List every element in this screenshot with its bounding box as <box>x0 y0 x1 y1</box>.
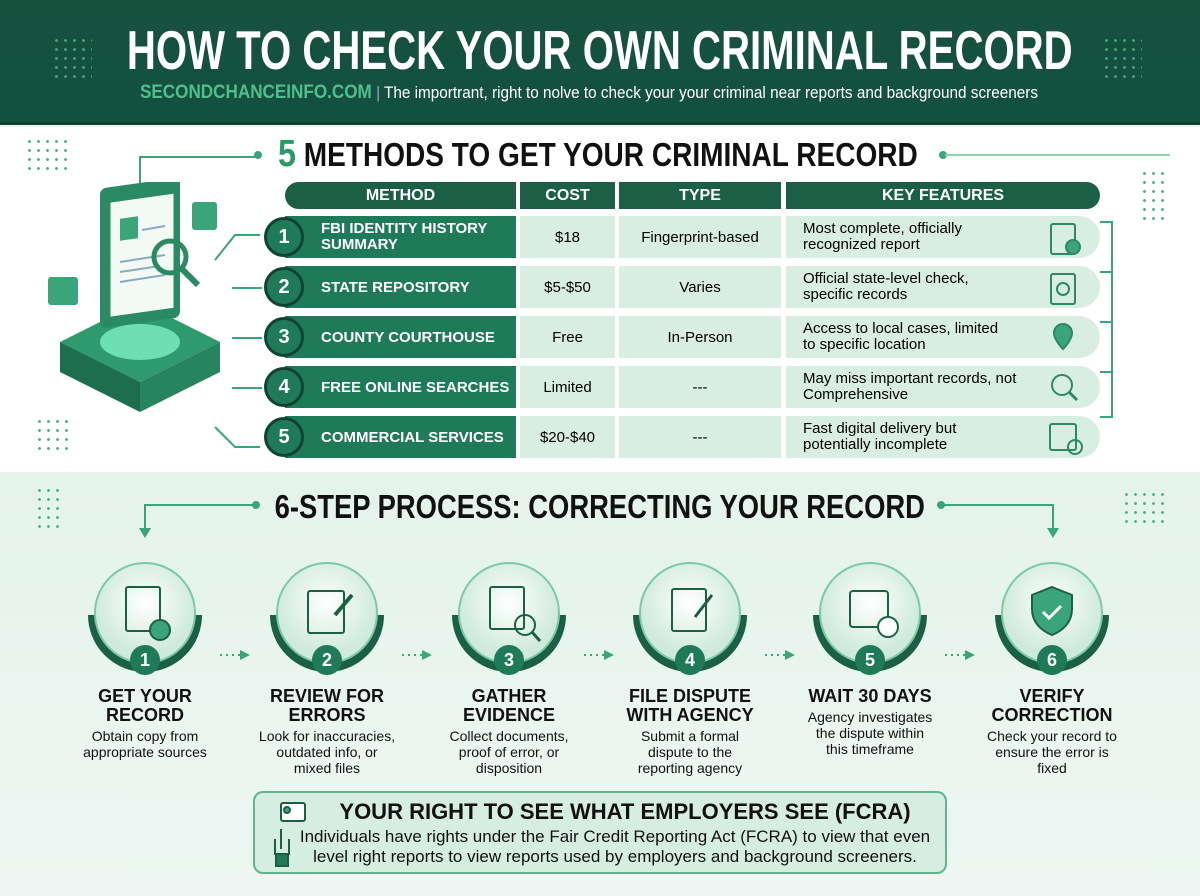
step texts: Obtain copy from <box>92 728 198 744</box>
step numbers <box>130 645 1067 675</box>
icon: ID card hand <box>274 802 306 867</box>
row 1: recognized report <box>803 236 920 253</box>
row 1: Fingerprint-based <box>641 228 759 246</box>
step texts: FILE DISPUTE <box>629 686 751 706</box>
row 1: FBI IDENTITY HISTORY <box>321 220 487 237</box>
row 2 <box>264 266 1100 308</box>
table header: KEY FEATURES <box>882 186 1004 204</box>
step numbers: 2 <box>322 650 332 670</box>
row 5: COMMERCIAL SERVICES <box>321 428 504 446</box>
row 2: Official state-level check, <box>803 270 969 287</box>
row 5: --- <box>692 428 708 446</box>
row 5: potentially incomplete <box>803 436 947 453</box>
step texts: EVIDENCE <box>463 705 555 725</box>
row 3: to specific location <box>803 336 926 353</box>
row 3: Access to local cases, limited <box>803 320 998 337</box>
row 5: Fast digital delivery but <box>803 420 956 437</box>
row 1: 1 <box>278 226 290 248</box>
row 2: 2 <box>278 276 290 298</box>
step numbers: 1 <box>140 650 150 670</box>
step texts: reporting agency <box>638 760 742 776</box>
callout: FCRA <box>253 791 947 874</box>
panel: methods <box>0 127 1200 472</box>
row 4: Limited <box>543 378 592 396</box>
step texts: mixed files <box>294 760 360 776</box>
row 2: STATE REPOSITORY <box>321 278 470 296</box>
row 1 <box>264 216 1100 258</box>
subtitle: SECONDCHANCEINFO.COM | The importrant, right to nolve to check your your criminal near reports and background screeners <box>140 82 1038 103</box>
step texts: REVIEW FOR <box>270 686 384 706</box>
row 1: $18 <box>555 228 580 246</box>
table header <box>285 182 1100 209</box>
table rows <box>264 216 1100 458</box>
icons: feature row icons <box>1049 223 1083 455</box>
step texts: this timeframe <box>826 741 914 757</box>
panel: process <box>0 472 1200 896</box>
heading: 5 methods: 5 METHODS TO GET YOUR CRIMINAL RECORD <box>278 133 918 175</box>
step texts: WITH AGENCY <box>626 705 754 725</box>
step texts: ensure the error is <box>995 744 1109 760</box>
table header: TYPE <box>679 186 721 204</box>
step texts: GATHER <box>472 686 546 706</box>
icons: steps <box>125 586 1073 642</box>
row 5: 5 <box>278 426 290 448</box>
step texts: appropriate sources <box>83 744 207 760</box>
step texts: Collect documents, <box>449 728 569 744</box>
row 4: Comprehensive <box>803 386 908 403</box>
row 4: FREE ONLINE SEARCHES <box>321 378 509 396</box>
row 3: Free <box>552 328 583 346</box>
step numbers: 3 <box>504 650 514 670</box>
step numbers: 4 <box>685 650 695 670</box>
illustration: device with document <box>48 182 220 412</box>
step texts: WAIT 30 DAYS <box>808 686 932 706</box>
step numbers: 5 <box>865 650 875 670</box>
row 1: Most complete, officially <box>803 220 962 237</box>
row 4 <box>264 366 1100 408</box>
step texts: ERRORS <box>288 705 366 725</box>
row 3: 3 <box>278 326 290 348</box>
row 4: May miss important records, not <box>803 370 1016 387</box>
row 1: SUMMARY <box>321 236 398 253</box>
steps <box>83 562 1117 776</box>
step texts: Look for inaccuracies, <box>259 728 395 744</box>
row 3: In-Person <box>667 328 733 346</box>
callout: FCRA: Individuals have rights under the Fair Credit Reporting Act (FCRA) to view that even level right reports to view reports used by employers and background screeners. <box>300 827 930 866</box>
row 2: specific records <box>803 286 907 303</box>
title: HOW TO CHECK YOUR OWN CRIMINAL RECORD <box>127 19 1073 81</box>
table header: COST <box>545 186 590 204</box>
step texts: fixed <box>1037 760 1067 776</box>
row 3: COUNTY COURTHOUSE <box>321 328 495 346</box>
header <box>0 0 1200 125</box>
heading: 6-step process: 6-STEP PROCESS: CORRECTING YOUR RECORD <box>275 488 925 525</box>
row 5 <box>264 416 1100 458</box>
step texts <box>83 686 1117 776</box>
step texts: disposition <box>476 760 542 776</box>
step texts: proof of error, or <box>459 744 559 760</box>
step texts: outdated info, or <box>276 744 378 760</box>
step texts: the dispute within <box>816 725 924 741</box>
row 4: 4 <box>278 376 290 398</box>
row 4: --- <box>692 378 708 396</box>
step texts: Agency investigates <box>808 709 932 725</box>
step texts: dispute to the <box>648 744 732 760</box>
row 5: $20-$40 <box>540 428 595 446</box>
callout: FCRA: YOUR RIGHT TO SEE WHAT EMPLOYERS SEE (FCRA) <box>339 799 911 824</box>
row 2: $5-$50 <box>544 278 591 296</box>
table header: METHOD <box>366 186 435 204</box>
row 3 <box>264 316 1100 358</box>
step texts: RECORD <box>106 705 184 725</box>
step texts: Check your record to <box>987 728 1117 744</box>
row 2: Varies <box>679 278 721 296</box>
step texts: GET YOUR <box>98 686 192 706</box>
step texts: Submit a formal <box>641 728 739 744</box>
step texts: CORRECTION <box>992 705 1112 725</box>
step numbers: 6 <box>1047 650 1057 670</box>
step texts: VERIFY <box>1019 686 1084 706</box>
